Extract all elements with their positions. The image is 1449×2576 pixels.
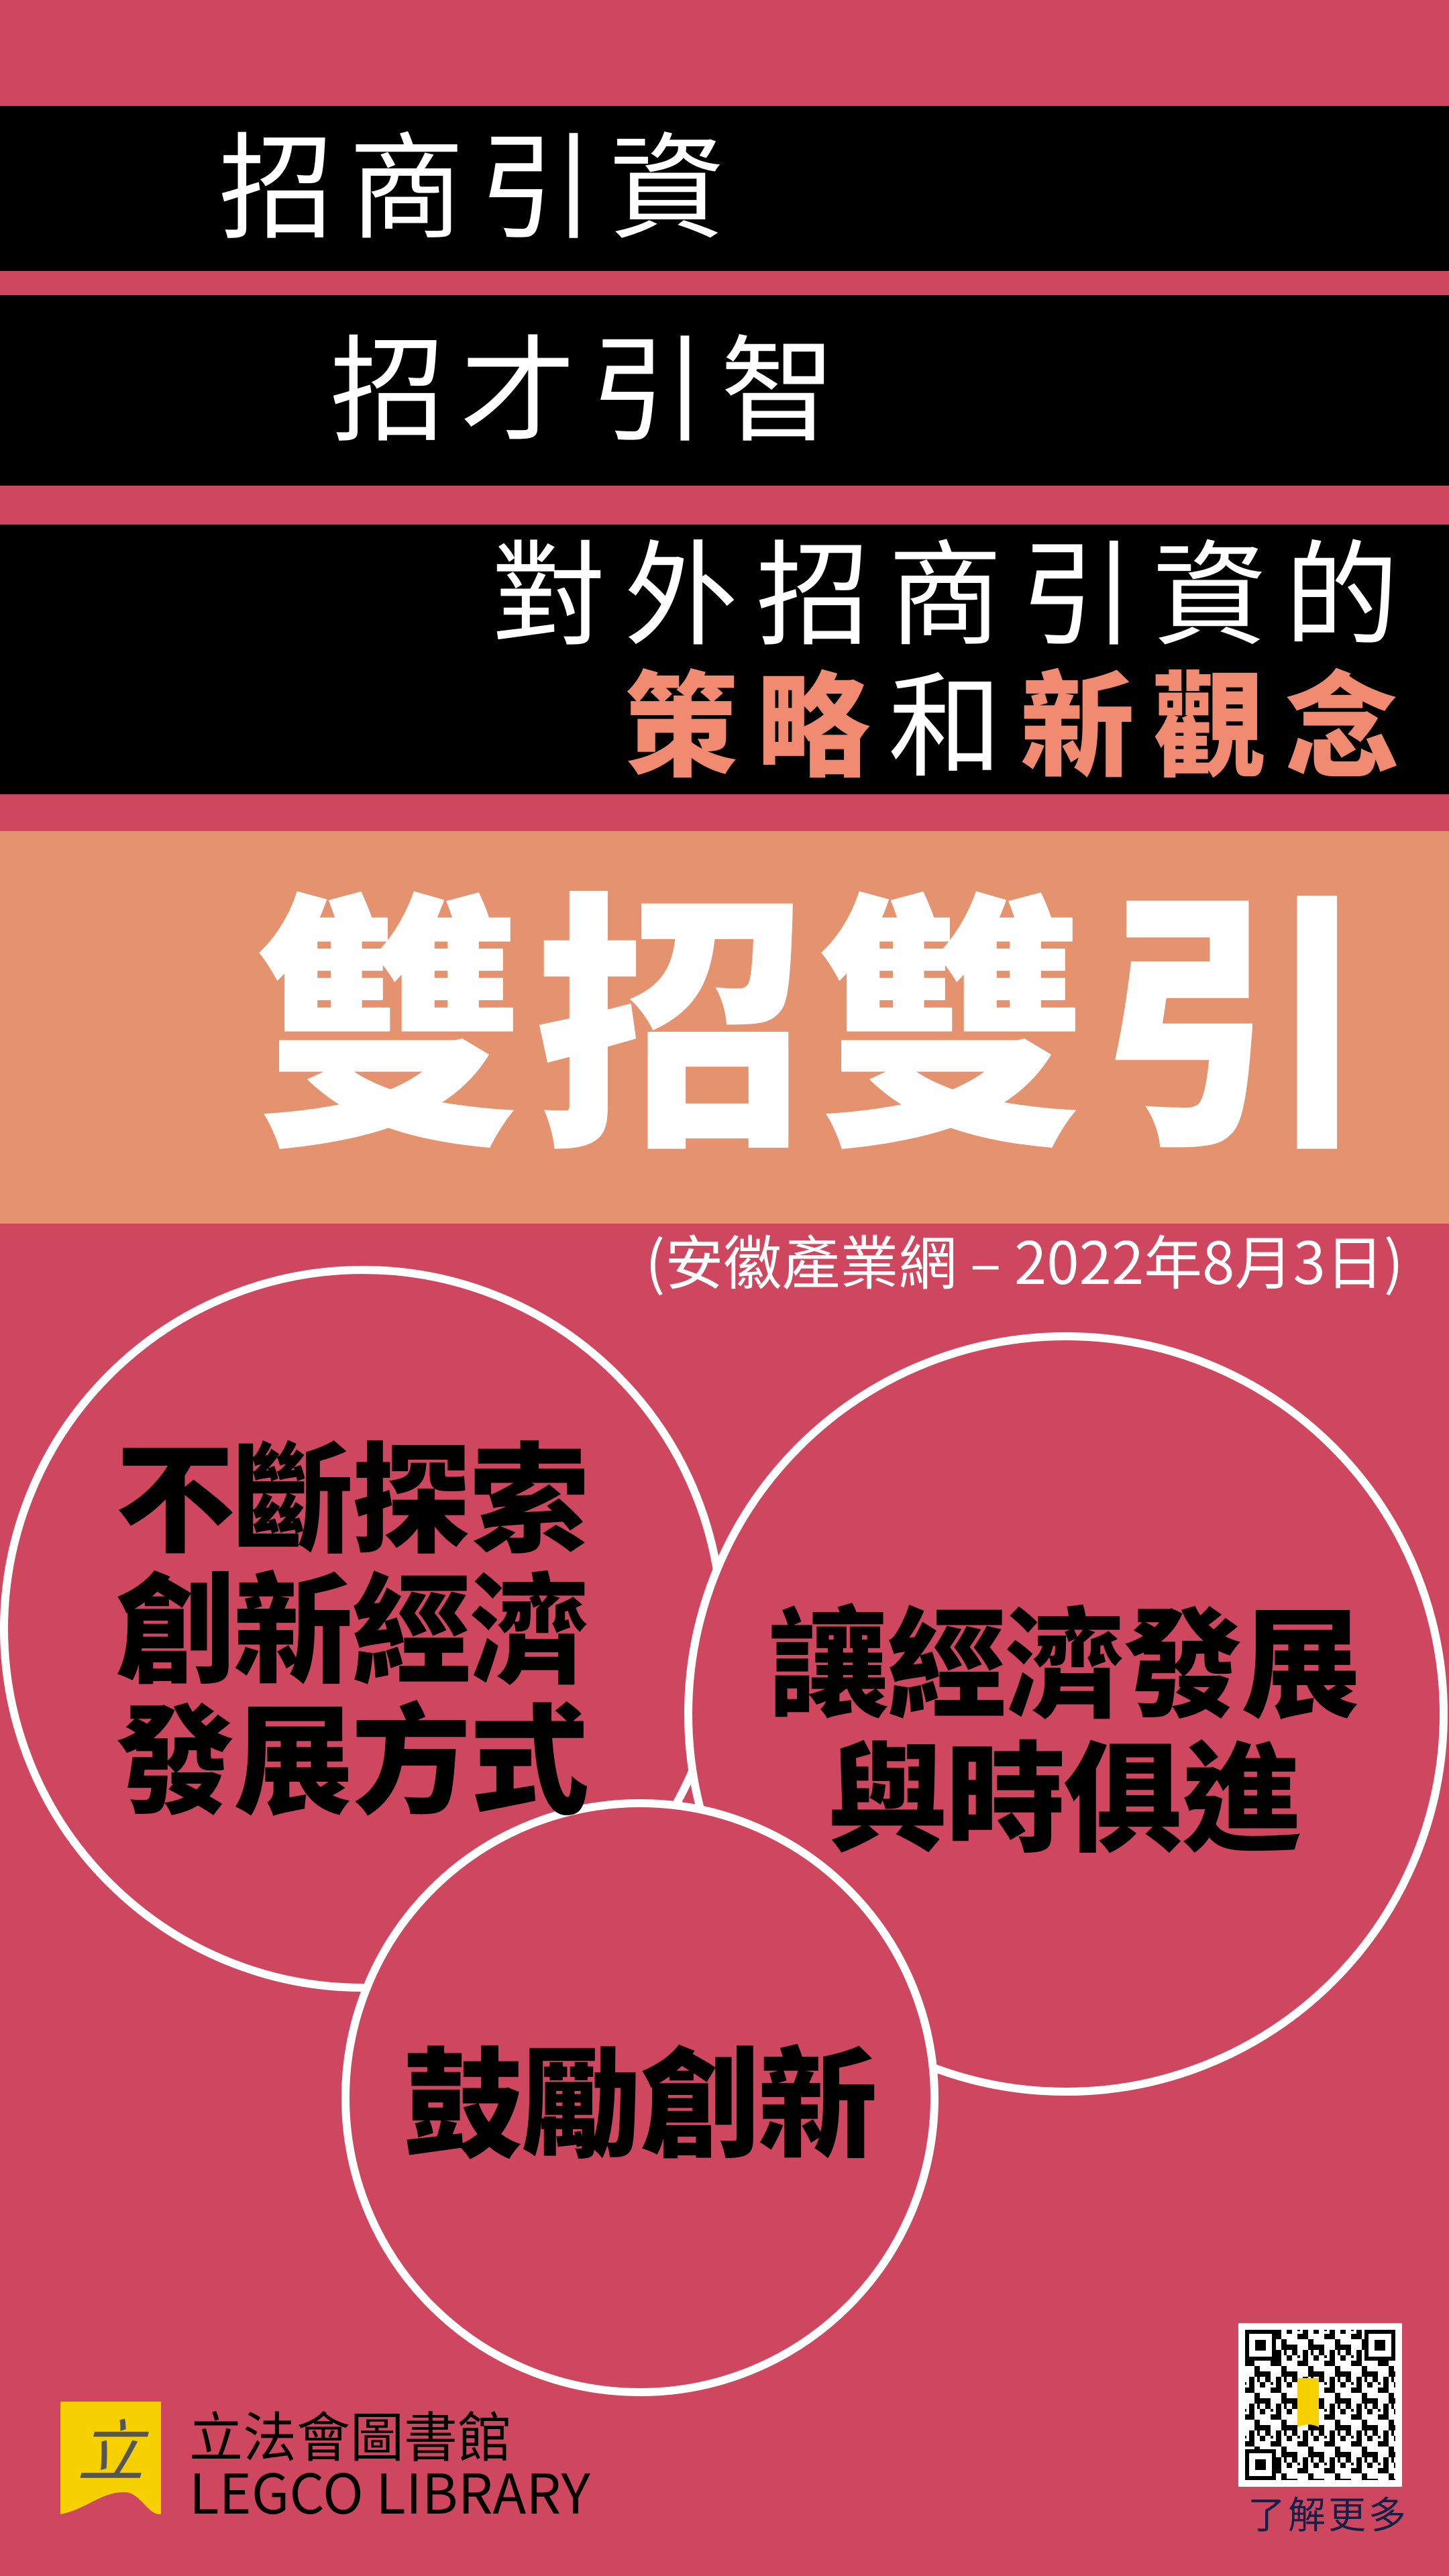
logo text (189, 2395, 590, 2530)
main title: 雙招雙引: 雙招雙引 (254, 877, 1378, 1181)
QR code (1238, 2323, 1402, 2487)
heading: 招商引資: 招商引資 (219, 125, 739, 254)
logo text: LEGCO LIBRARY (189, 2450, 590, 2530)
circle 2 text: 與時俱進 (828, 1733, 1300, 1867)
black bar 2: 招才引智 (0, 295, 1449, 486)
subtitle line 1: 對外招商引資的 (492, 533, 1417, 660)
icon: yellow ribbon (60, 2402, 161, 2514)
icon: yellow ribbon: 立 (77, 2416, 149, 2490)
black bar 1: 招商引資 (0, 106, 1449, 271)
circle 1 text (115, 1434, 588, 1829)
circle 2 (688, 1336, 1444, 2092)
circle 3 (345, 1803, 934, 2392)
circle 1 text: 創新經濟 (115, 1565, 588, 1699)
heading: 招才引智: 招才引智 (330, 327, 851, 456)
circle 2 text (769, 1599, 1359, 1867)
orange band: main title (0, 831, 1449, 1224)
circle 1 text: 不斷探索 (115, 1434, 588, 1568)
circle 3 text: 鼓勵創新 (404, 2039, 876, 2173)
black bar 3: subtitle (0, 525, 1449, 794)
circle 1 (4, 1270, 722, 1988)
subtitle line 2: 策略和新觀念 (624, 664, 1417, 792)
circle 1 text: 發展方式 (115, 1696, 588, 1829)
logo: LegCo Library (60, 2395, 590, 2530)
source note: (安徽產業網 – 2022年8月3日) (645, 1217, 1403, 1301)
circle 2 text: 讓經濟發展 (769, 1599, 1359, 1733)
logo text: 立法會圖書館 (189, 2395, 511, 2473)
link label: 了解更多: 了解更多 (1248, 2494, 1409, 2536)
